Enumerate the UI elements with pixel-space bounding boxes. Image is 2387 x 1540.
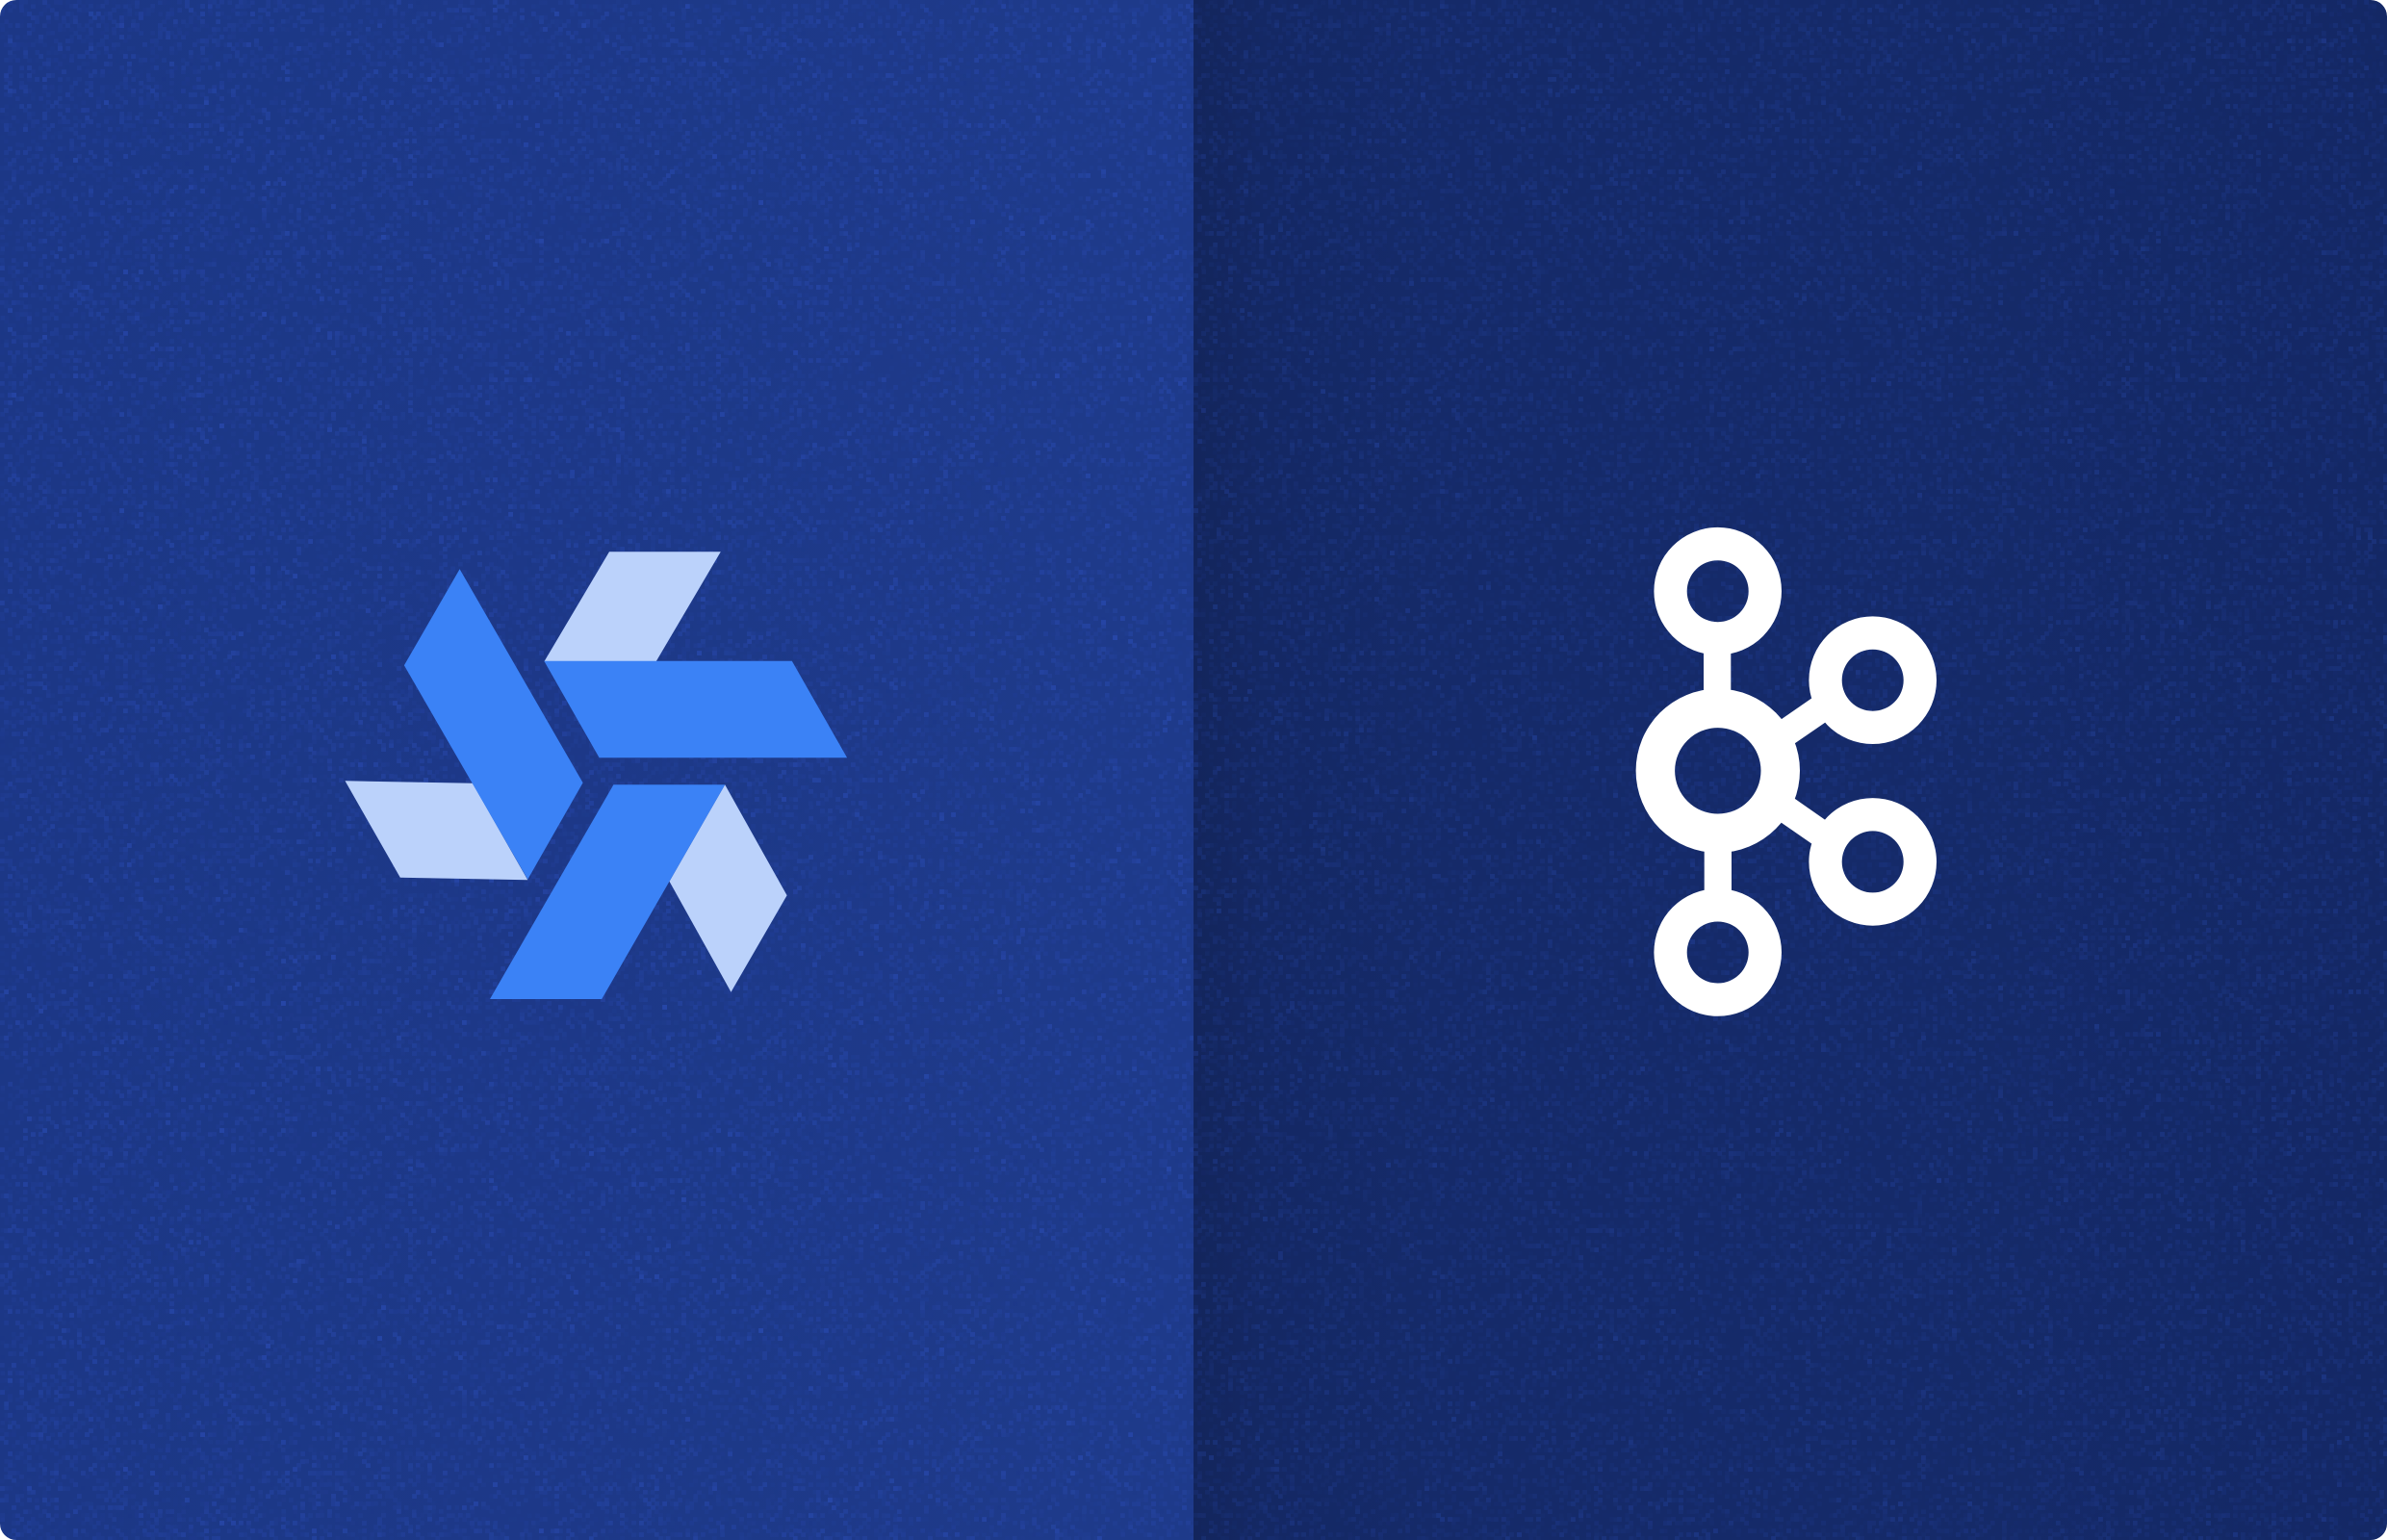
- blue blade: upper left: [404, 569, 583, 880]
- icon: network node logo: [1636, 527, 1937, 1016]
- node: center: [1636, 689, 1800, 853]
- connector: upper right: [1782, 699, 1825, 743]
- light blade: lower right: [670, 784, 787, 992]
- node: upper right: [1809, 616, 1937, 744]
- connector: bottom: [1704, 851, 1732, 890]
- connector: top: [1704, 653, 1731, 690]
- blue blade: bottom: [490, 784, 725, 999]
- icon: pinwheel logo: [345, 552, 847, 999]
- light blade: lower left: [345, 781, 527, 880]
- node: top: [1654, 527, 1782, 654]
- light blade: top: [544, 552, 721, 662]
- panel: right navy background: [1194, 0, 2387, 1540]
- node: lower right: [1809, 798, 1937, 926]
- blue blade: right: [544, 661, 847, 757]
- node: bottom: [1654, 888, 1782, 1016]
- panel: left blue background: [0, 0, 1194, 1540]
- connector: lower right: [1772, 792, 1834, 843]
